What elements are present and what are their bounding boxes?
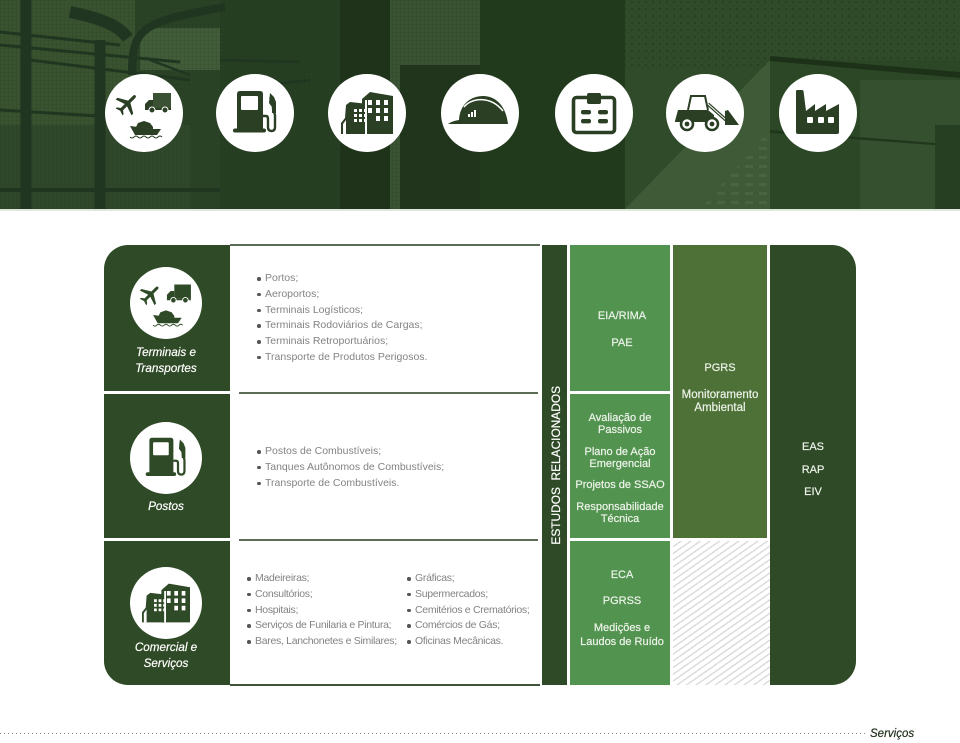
hatched empty cell (673, 541, 770, 685)
studies: Monitoramento Ambiental: Monitoramento (682, 389, 758, 401)
icon: buildings badge (130, 567, 202, 639)
label: Comercial e Serviços: Serviços (144, 657, 188, 670)
dark column: EAS RAP EIV (770, 245, 856, 685)
studies: Responsabilidade Técnica: Responsabilidade (576, 501, 664, 513)
studies: Plano de Ação Emergencial (585, 446, 656, 470)
studies: Projetos de SSAO: Projetos de SSAO (575, 479, 665, 491)
list: comercial coluna 2: Supermercados; (415, 588, 488, 600)
studies: EIV: EIV (804, 486, 822, 498)
list: postos (257, 445, 444, 489)
list: terminais e transportes: Terminais Rodoviários de Cargas; (265, 319, 423, 331)
label: Comercial e Serviços (135, 641, 197, 670)
list: comercial coluna 2: Cemitérios e Crematórios; (415, 604, 529, 616)
studies: Plano de Ação Emergencial: Emergencial (589, 458, 651, 470)
footer dotted rule (0, 733, 866, 734)
list: postos: Postos de Combustíveis; (265, 445, 381, 457)
icon: factory circle (779, 74, 857, 152)
list: comercial coluna 1 (247, 572, 397, 647)
list: comercial coluna 1: Madeireiras; (255, 572, 309, 584)
footer label: Serviços: Serviços (870, 728, 914, 740)
icon: fuel pump badge (130, 422, 202, 494)
icon: buildings circle (328, 74, 406, 152)
list: terminais e transportes: Portos; (265, 272, 298, 284)
label: Postos: Postos (148, 500, 184, 513)
category cell: Comercial e Serviços (104, 541, 230, 685)
column: Estudos Relacionados (542, 245, 567, 685)
studies: Avaliação de Passivos: Avaliação de (589, 412, 651, 424)
studies: Medições e Laudos de Ruído (580, 622, 664, 648)
list: comercial coluna 2: Gráficas; (415, 572, 454, 584)
list: terminais e transportes: Transporte de Produtos Perigosos. (265, 351, 427, 363)
panel: sector matrix (104, 245, 856, 685)
studies: Responsabilidade Técnica: Técnica (601, 512, 639, 524)
studies: RAP: RAP (802, 464, 824, 476)
studies: PGRSS: PGRSS (603, 595, 641, 607)
green cell: EIA/RIMA (570, 245, 670, 391)
list: comercial coluna 1: Hospitais; (255, 604, 298, 616)
studies: Monitoramento Ambiental (682, 388, 758, 414)
list: comercial coluna 2 (407, 572, 529, 647)
studies: Plano de Ação Emergencial: Plano de Ação (585, 446, 655, 458)
category cell: Terminais e Transportes (104, 245, 230, 391)
list: postos: Transporte de Combustíveis. (265, 477, 399, 489)
studies: PGRS: PGRS (704, 362, 736, 374)
list: comercial coluna 2: Comércios de Gás; (415, 619, 500, 631)
list: terminais e transportes (257, 272, 427, 363)
studies: Avaliação de Passivos: Passivos (598, 424, 642, 436)
icon: plane, truck and ship circle (105, 74, 183, 152)
list: postos: Tanques Autônomos de Combustíveis; (265, 461, 444, 473)
studies: EAS: EAS (802, 441, 824, 453)
banner: industrial photo with green overlay (0, 0, 960, 211)
list: terminais e transportes: Terminais Logísticos; (265, 304, 363, 316)
list: terminais e transportes: Aeroportos; (265, 288, 319, 300)
label: Terminais e Transportes: Terminais e (136, 346, 196, 359)
icon: loader circle (666, 74, 744, 152)
icon: hard hat circle (441, 74, 519, 152)
studies: Monitoramento Ambiental: Ambiental (694, 402, 746, 414)
icon: plane, truck and ship badge (130, 267, 202, 339)
studies: ECA: ECA (611, 569, 633, 581)
list: comercial coluna 2: Oficinas Mecânicas. (415, 635, 503, 647)
studies: EIA/RIMA: EIA/RIMA (598, 310, 646, 322)
green cell: ECA (570, 541, 670, 685)
icon: fuel pump circle (216, 74, 294, 152)
studies: PAE: PAE (611, 337, 633, 349)
label: Terminais e Transportes (135, 346, 197, 375)
studies: Responsabilidade Técnica (576, 501, 664, 524)
list: terminais e transportes: Terminais Retroportuários; (265, 335, 388, 347)
icon: badge board circle (555, 74, 633, 152)
list: comercial coluna 1: Consultórios; (255, 588, 312, 600)
olive column: PGRS (673, 245, 767, 538)
list: comercial coluna 1: Serviços de Funilaria e Pintura; (255, 619, 391, 631)
vertical heading: Estudos Relacionados: ESTUDOS RELACIONADOS (549, 386, 563, 545)
category cell: Postos (104, 394, 230, 538)
studies: Medições e Laudos de Ruído: Laudos de Ruído (580, 636, 664, 648)
list: comercial coluna 1: Bares, Lanchonetes e Similares; (255, 635, 397, 647)
studies: Medições e Laudos de Ruído: Medições e (594, 622, 650, 634)
label: Terminais e Transportes: Transportes (135, 362, 197, 375)
green cell: Avaliação (570, 394, 670, 538)
label: Comercial e Serviços: Comercial e (135, 641, 197, 654)
studies: Avaliação de Passivos (588, 412, 651, 436)
